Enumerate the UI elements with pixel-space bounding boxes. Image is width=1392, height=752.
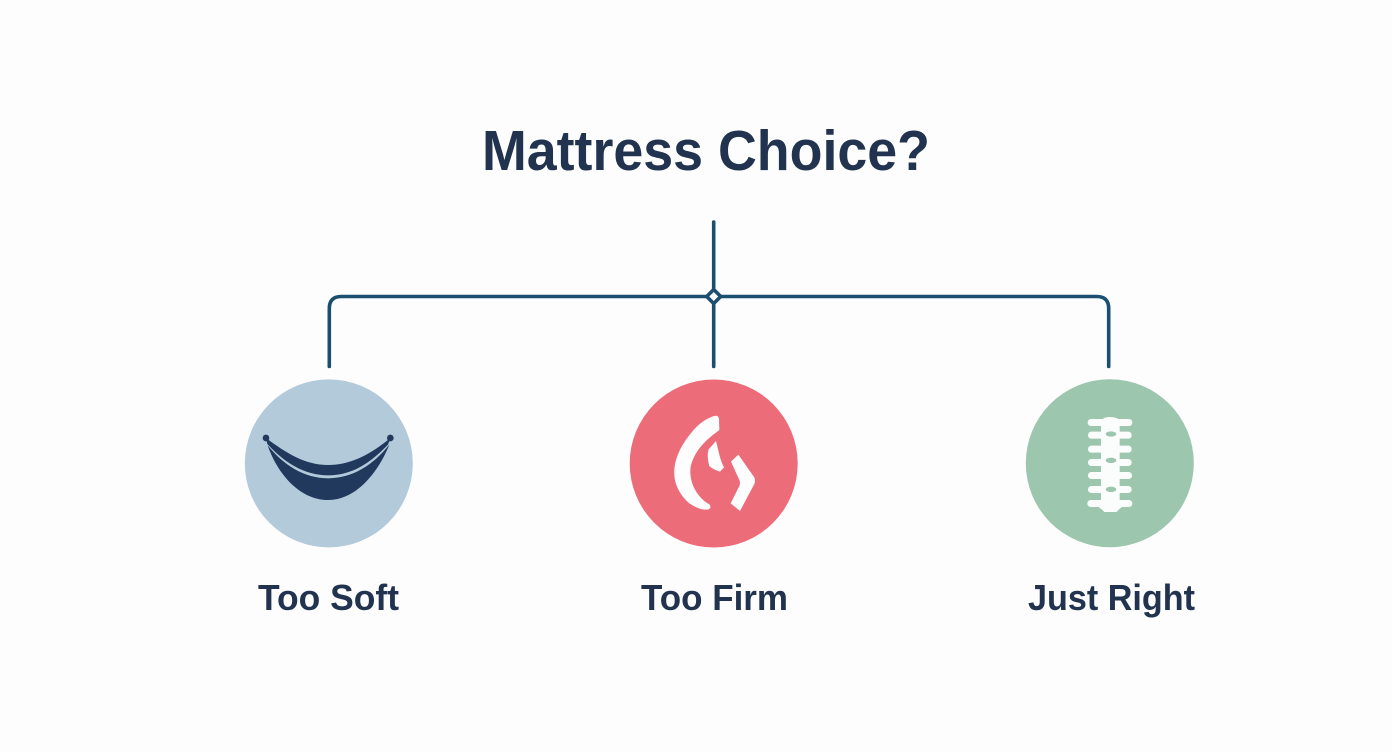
label: too firm: Too Firm	[641, 577, 788, 618]
icon: hammock	[245, 379, 413, 547]
connector tree	[329, 222, 1109, 366]
title: Mattress Choice?	[482, 119, 930, 183]
icon: spine	[1026, 379, 1194, 547]
panel: too soft	[245, 379, 413, 618]
label: just right: Just Right	[1028, 577, 1195, 618]
panel: just right	[1026, 379, 1195, 618]
label: too soft: Too Soft	[258, 577, 399, 618]
panel: too firm	[630, 380, 798, 618]
icon: pressure flame	[630, 380, 798, 548]
